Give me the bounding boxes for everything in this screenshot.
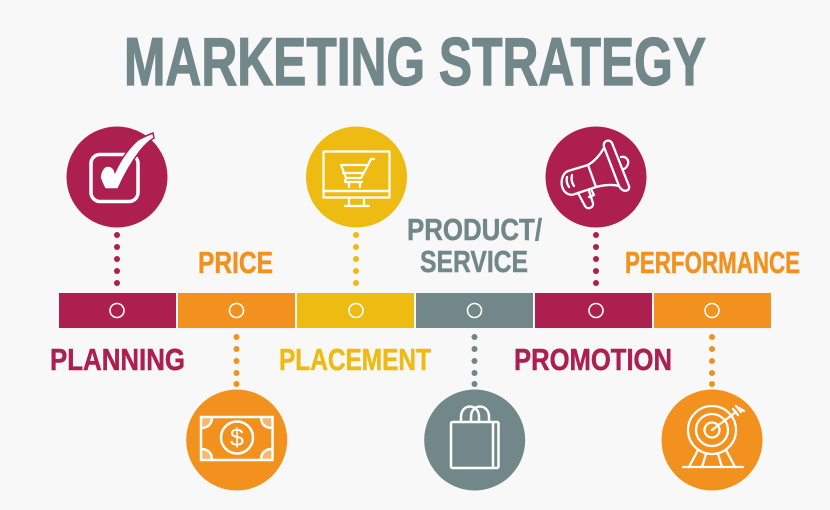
label: product/service (407, 212, 542, 279)
dollar sign: $ (230, 424, 244, 452)
icon: archery target (662, 390, 762, 490)
icon: shopping bag (424, 390, 525, 490)
label: product/service: PRODUCT/ (407, 212, 542, 247)
label: placement: PLACEMENT (279, 342, 431, 377)
icon: checklist checkbox (66, 126, 168, 228)
icon: monitor with cart (306, 126, 407, 228)
timeline bar (59, 293, 771, 328)
connector: performance (709, 334, 715, 387)
label: price: PRICE (198, 245, 273, 280)
label: planning: PLANNING (50, 342, 185, 377)
connector: promotion (593, 232, 599, 286)
connector: placement (353, 232, 359, 286)
icon: megaphone (546, 126, 646, 228)
label: product/service: SERVICE (420, 244, 528, 279)
corner shading (201, 417, 272, 460)
icon: banknote with dollar (186, 390, 287, 490)
label: promotion: PROMOTION (514, 342, 672, 377)
connector: price (234, 334, 240, 387)
connector: planning (114, 232, 120, 286)
connector: product (472, 334, 478, 387)
